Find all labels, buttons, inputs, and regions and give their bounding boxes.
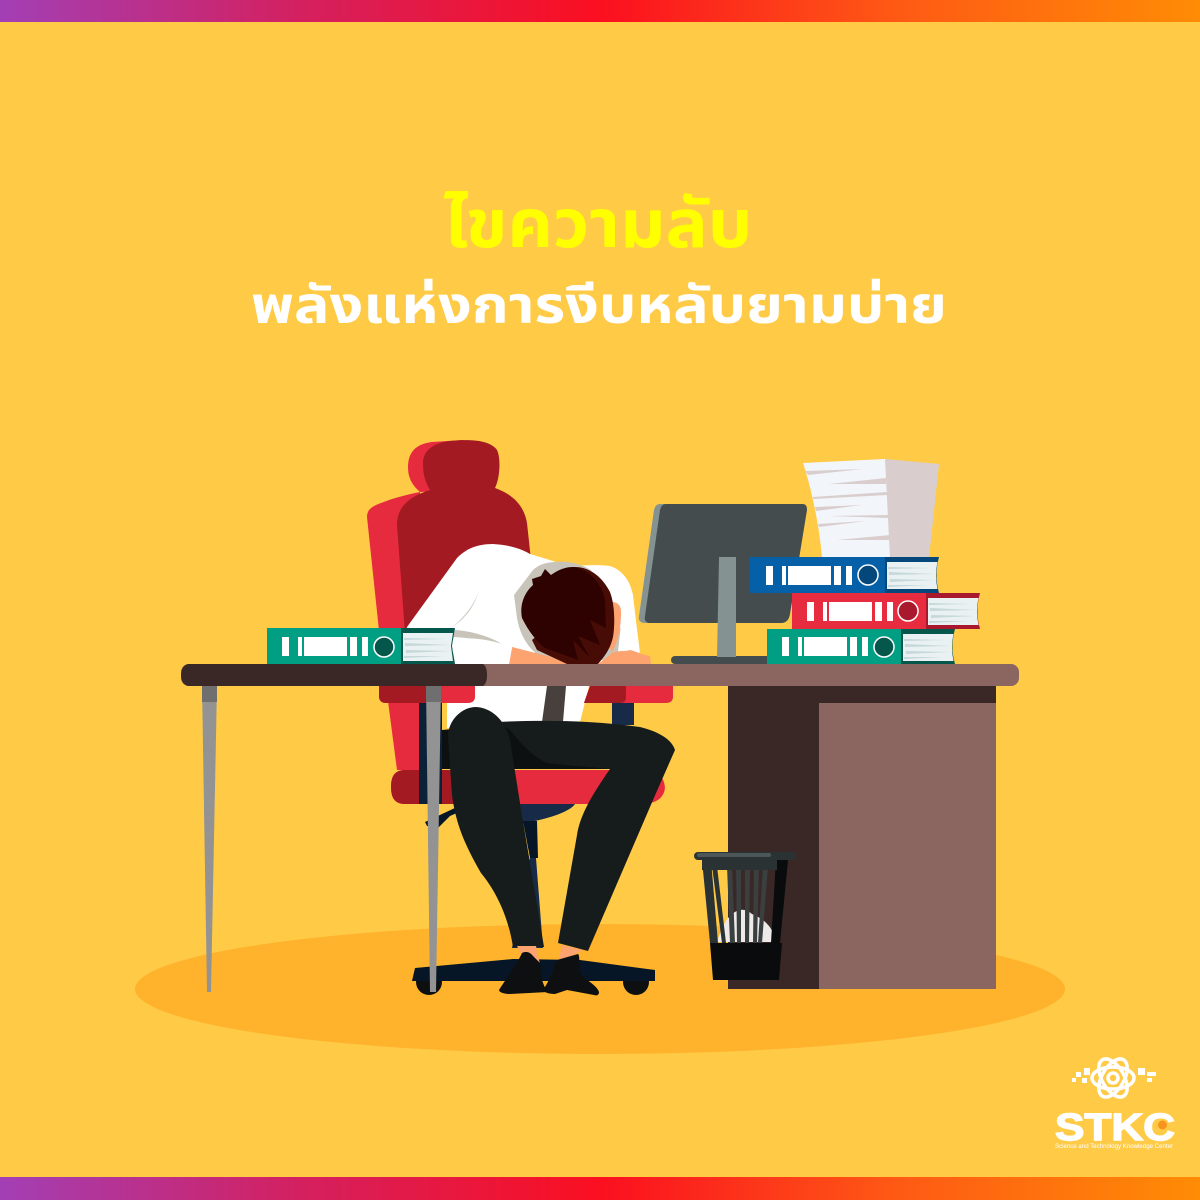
man: shirt	[400, 544, 640, 728]
man: legs	[442, 707, 675, 951]
binder: green stacked	[767, 629, 955, 664]
monitor	[639, 504, 807, 664]
logo wordmark: STKC	[1055, 1107, 1175, 1149]
title: subheading: พลังแห่งการงีบหลับยามบ่าย	[251, 277, 947, 335]
desk leg left	[202, 686, 217, 992]
chair seat	[391, 770, 665, 804]
logo atom icon	[1092, 1054, 1134, 1102]
title: heading: ไขความลับ	[444, 186, 752, 262]
man: shirt cuff over binder	[452, 638, 512, 664]
man: feet	[499, 945, 599, 995]
binder: blue	[750, 557, 939, 593]
top gradient bar	[0, 0, 1200, 22]
desk leg right	[426, 686, 441, 992]
stack of papers	[803, 459, 939, 558]
man: tie	[542, 686, 566, 722]
desk top	[181, 664, 1019, 686]
logo pixel squares	[1072, 1068, 1156, 1083]
armrest right	[584, 686, 673, 703]
logo tagline: Science and Technology Knowledge Center	[1055, 1144, 1173, 1150]
logo: STKC	[1055, 1054, 1175, 1150]
desk pedestal	[728, 686, 996, 989]
armrest left shade	[379, 686, 441, 703]
armrest left	[379, 686, 475, 703]
bottom gradient bar	[0, 1177, 1200, 1200]
man: hair	[521, 567, 614, 664]
binder: green left	[267, 628, 455, 664]
waste bin	[694, 852, 796, 980]
man: arms and ear	[509, 602, 651, 664]
binder: red	[792, 593, 980, 629]
floor shadow	[135, 924, 1065, 1054]
chair base and wheels	[412, 959, 655, 995]
logo orange dot	[1157, 1120, 1168, 1130]
office chair back	[367, 440, 531, 770]
armrest right shade	[584, 686, 626, 703]
chair supports	[419, 700, 634, 948]
